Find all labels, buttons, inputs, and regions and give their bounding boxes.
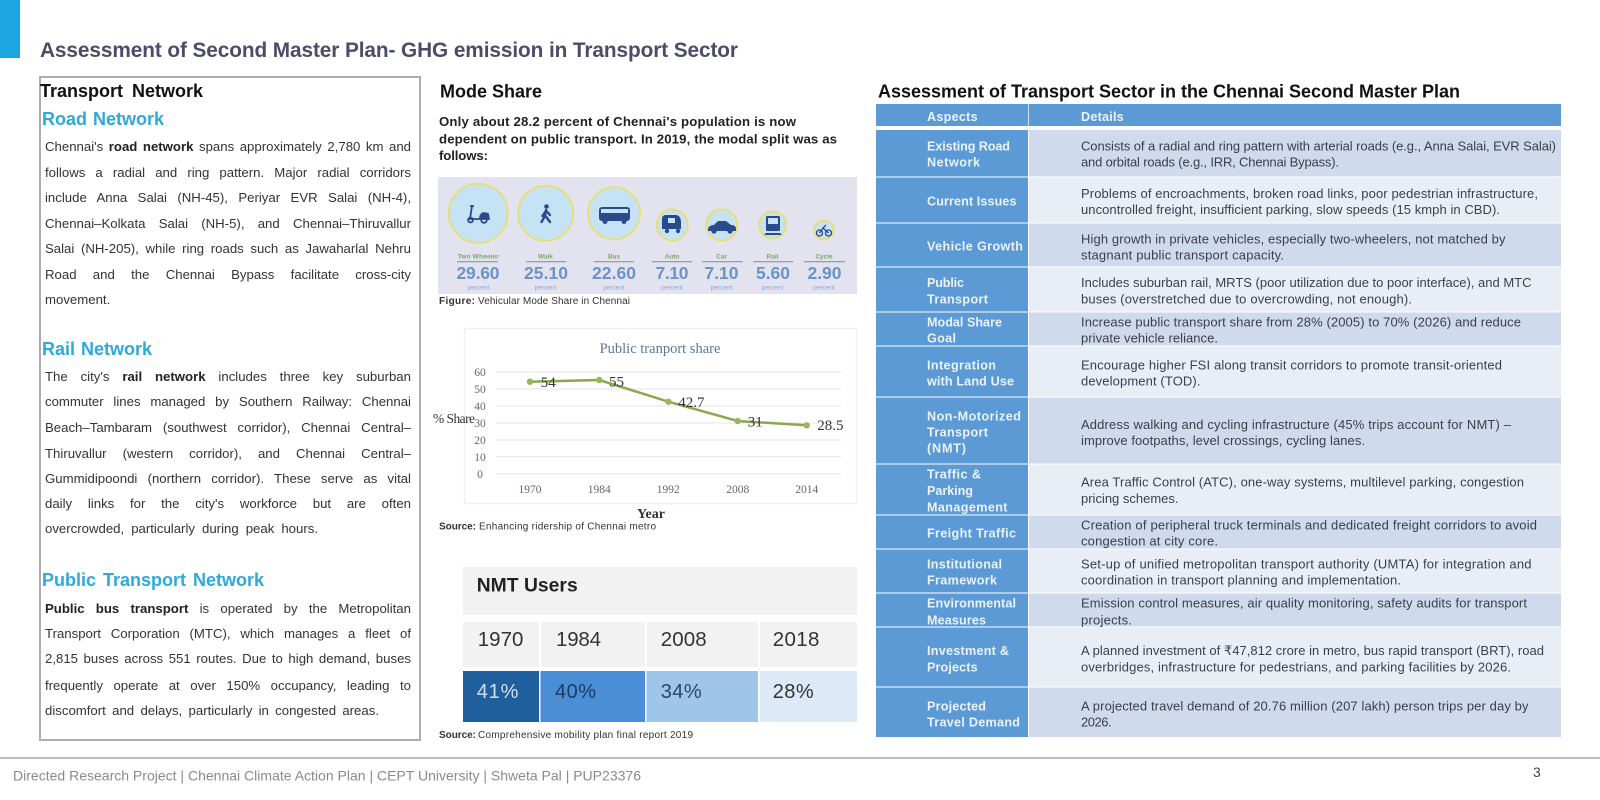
mode share values — [456, 263, 842, 283]
row: investment and projects — [876, 628, 1561, 686]
footer text: Directed Research Project | Chennai Climate Action Plan | CEPT University | Shweta Pal | PUP23376 — [13, 768, 641, 784]
mode share intro text: Only about 28.2 percent of Chennai's population is now — [439, 114, 797, 129]
row: institutional framework: Framework — [927, 574, 998, 588]
row: traffic and parking management: Traffic & — [927, 468, 981, 482]
NMT values: 41% — [477, 681, 519, 703]
NMT source: Comprehensive mobility plan final report 2019 — [478, 730, 693, 741]
table header row: Aspects — [927, 110, 978, 124]
row: modal share goal: Increase public transport share from 28% (2005) to 70% (2026) and reduce — [1081, 314, 1521, 330]
row: vehicle growth — [876, 224, 1561, 266]
figure caption: Vehicular Mode Share in Chennai — [478, 296, 630, 307]
row: existing road network: Existing Road — [927, 140, 1010, 154]
row: institutional framework: Set-up of unified metropolitan transport authority (UMTA) for integration and — [1081, 556, 1532, 572]
chart source: Enhancing ridership of Chennai metro — [479, 521, 656, 532]
mode share heading: Mode Share — [440, 82, 542, 102]
mode share infographic: percent — [661, 284, 683, 292]
x axis title: Year — [637, 507, 665, 522]
row: environmental measures: Emission control measures, air quality monitoring, safety audits for transport — [1081, 596, 1527, 610]
NMT years: 1984 — [556, 628, 601, 651]
corner accent bar — [0, 0, 20, 58]
mode share values: 29.60 — [456, 263, 500, 283]
mode share infographic: percent — [711, 284, 733, 292]
mode share infographic: percent — [535, 284, 557, 292]
row: environmental measures — [876, 594, 1561, 628]
mode share labels: Two Wheeler — [458, 254, 499, 260]
row: integration with land use: development (TOD). — [1081, 374, 1200, 388]
y axis labels: 50 — [474, 384, 486, 396]
icon: bus — [599, 207, 630, 224]
title: Assessment of Second Master Plan- GHG emission in Transport Sector — [40, 39, 738, 62]
row: modal share goal: Goal — [927, 332, 956, 346]
road network text: movement. — [45, 292, 110, 307]
rail network text: daily links for the city's workforce but are often — [45, 496, 411, 511]
public transport network text: Transport Corporation (MTC), which manages a fleet of — [45, 626, 411, 641]
row: modal share goal: Modal Share — [927, 316, 1002, 330]
mode share infographic: percent — [467, 284, 489, 292]
mode share values: 7.10 — [656, 263, 689, 283]
NMT heading: NMT Users — [477, 576, 578, 597]
panel: mode share — [433, 82, 857, 741]
row: existing road network: Network — [927, 156, 981, 170]
mode share labels — [458, 254, 833, 260]
row: non-motorized transport: Address walking and cycling infrastructure (45% trips account for NMT) – — [1081, 417, 1512, 432]
data labels: 28.5 — [817, 418, 844, 434]
row: environmental measures: Measures — [927, 614, 986, 628]
y axis labels: 20 — [474, 435, 486, 447]
mode share labels: Car — [716, 254, 728, 260]
public transport network text: discomfort and delays, particularly in congested areas. — [45, 702, 379, 718]
rail network text: overcrowded, particularly during peak hours. — [45, 521, 318, 536]
y axis labels: 0 — [477, 469, 483, 481]
row: traffic and parking management: pricing schemes. — [1081, 491, 1178, 506]
row: projected travel demand: A projected travel demand of 20.76 million (207 lakh) person trips per day by — [1081, 698, 1529, 714]
x axis labels: 1970 — [518, 484, 542, 496]
y axis labels: 60 — [474, 367, 486, 379]
road network text: include Anna Salai (NH-45), Periyar EVR Salai (NH-4), — [45, 190, 411, 205]
road network text: Chennai's road network spans approximately 2,780 km and — [45, 139, 411, 154]
mode share values: 2.90 — [808, 263, 842, 283]
icon: two wheeler — [468, 206, 489, 223]
icon: auto rickshaw — [662, 215, 681, 233]
table heading: Assessment of Transport Sector in the Chennai Second Master Plan — [878, 82, 1460, 102]
road network text: follows a radial and ring pattern. Major radial corridors — [45, 165, 411, 180]
row: integration with land use: with Land Use — [926, 374, 1014, 388]
rail network text — [45, 369, 411, 536]
row: institutional framework: Institutional — [927, 558, 1002, 572]
row: freight traffic: congestion at city core. — [1081, 534, 1218, 548]
row: non-motorized transport: Transport — [927, 426, 989, 440]
row: traffic and parking management: Management — [927, 500, 1008, 514]
mode share infographic: percent — [603, 284, 625, 292]
rail network text: Beach–Tambaram (southwest corridor), Chennai Central– — [45, 420, 411, 434]
icon: rail — [764, 216, 782, 235]
rail network text: commuter lines managed by Southern Railway: Chennai — [45, 394, 411, 409]
row: projected travel demand: Projected — [927, 700, 986, 714]
row: traffic and parking management — [876, 464, 1561, 514]
mode share values: 7.10 — [704, 263, 739, 283]
road network text: Salai (NH-205), while ring roads such as Jawaharlal Nehru — [45, 241, 411, 256]
rail network text: The city's rail network includes three key suburban — [45, 369, 411, 384]
row: vehicle growth: stagnant public transport capacity. — [1081, 248, 1284, 262]
row: investment and projects: Investment & — [927, 644, 1009, 658]
icon: walking person — [542, 204, 550, 222]
mode share infographic: percent — [762, 284, 784, 292]
panel heading: Transport Network — [40, 81, 203, 101]
x axis labels — [518, 484, 818, 496]
mode share labels: Bus — [608, 254, 621, 260]
row: current issues: Problems of encroachments, broken road links, poor pedestrian infrastructure, — [1081, 186, 1538, 201]
figure caption: Figure: — [439, 296, 475, 307]
row: freight traffic — [876, 516, 1561, 548]
panel: assessment table — [876, 82, 1561, 737]
y axis labels — [474, 367, 486, 481]
x axis labels: 2014 — [795, 484, 818, 496]
row: current issues — [876, 178, 1561, 222]
row: freight traffic: Creation of peripheral truck terminals and dedicated freight corridors to avoid — [1081, 518, 1537, 532]
row: public transport: Includes suburban rail, MRTS (poor utilization due to poor interface), and MTC — [1081, 275, 1532, 290]
row: existing road network — [876, 130, 1561, 176]
x axis labels: 1992 — [657, 484, 680, 496]
mode share intro text: dependent on public transport. In 2019, the modal split was as — [439, 131, 837, 146]
row: non-motorized transport: Non-Motorized — [927, 410, 1021, 424]
NMT users table — [463, 567, 857, 722]
row: non-motorized transport — [876, 398, 1561, 464]
row: institutional framework — [876, 550, 1561, 592]
row: current issues: uncontrolled freight, insufficient parking, slow speeds (15 kmph in CBD). — [1081, 202, 1500, 217]
row: investment and projects: overbridges, infrastructure for pedestrians, and parking facilities by 2026. — [1081, 660, 1511, 674]
y axis labels: 40 — [474, 401, 486, 413]
NMT years: 2008 — [661, 628, 707, 651]
public transport network text: 2,815 buses across 551 routes. Due to high demand, buses — [45, 651, 411, 666]
mode share infographic — [438, 177, 857, 294]
public transport network text: Public bus transport is operated by the Metropolitan — [45, 601, 411, 616]
row: non-motorized transport: improve footpaths, level crossings, cycling lanes. — [1081, 433, 1365, 448]
data labels — [541, 375, 844, 434]
rail network text: Gummidipoondi (northern corridor). These serve as vital — [45, 471, 411, 486]
row: integration with land use: Encourage higher FSI along transit corridors to promote transit-oriented — [1081, 358, 1502, 372]
NMT years: 1970 — [478, 628, 523, 651]
public transport network heading: Public Transport Network — [42, 570, 264, 590]
NMT years — [478, 628, 819, 651]
icon: cycle — [816, 225, 832, 236]
row: existing road network: Consists of a radial and ring pattern with arterial roads (e.g., Anna Salai, EVR Salai) — [1081, 138, 1556, 154]
y axis labels: 10 — [474, 452, 486, 464]
NMT values — [477, 681, 814, 703]
row: projected travel demand — [876, 688, 1561, 737]
line chart: public transport share — [433, 328, 856, 522]
public transport network text: frequently operate at over 150% occupancy, leading to — [45, 678, 411, 692]
row: traffic and parking management: Area Traffic Control (ATC), one-way systems, multilevel parking, congestion — [1081, 474, 1524, 490]
page number: 3 — [1533, 764, 1541, 780]
y axis title: % Share — [433, 411, 475, 426]
data labels: 42.7 — [678, 395, 705, 411]
mode share labels: Walk — [538, 254, 553, 260]
mode share intro text — [439, 114, 837, 163]
NMT values: 34% — [661, 681, 702, 703]
mode share labels: Auto — [665, 254, 679, 260]
road network text: Chennai–Kolkata Salai (NH-5), and Chennai–Thiruvallur — [45, 216, 411, 231]
row: vehicle growth: Vehicle Growth — [927, 240, 1023, 254]
row: modal share goal — [876, 312, 1561, 346]
chart source: Source: — [439, 521, 476, 532]
road network heading: Road Network — [42, 109, 164, 129]
NMT values: 28% — [773, 681, 814, 703]
row: freight traffic: Freight Traffic — [927, 526, 1016, 540]
y axis labels: 30 — [474, 418, 486, 430]
x axis labels: 2008 — [726, 484, 749, 496]
rail network heading: Rail Network — [42, 339, 152, 359]
mode share values: 22.60 — [592, 263, 636, 283]
row: traffic and parking management: Parking — [927, 484, 973, 498]
public transport network text — [45, 601, 412, 718]
mode share labels: Cycle — [815, 254, 833, 260]
row: investment and projects: A planned investment of ₹47,812 crore in metro, bus rapid transport (BRT), road — [1081, 643, 1544, 658]
rail network text: Thiruvallur (western corridor), and Chennai Central– — [45, 446, 411, 460]
NMT values: 40% — [555, 681, 596, 703]
row: institutional framework: coordination in transport planning and implementation. — [1081, 572, 1401, 588]
row: public transport: Public — [927, 276, 964, 290]
row: investment and projects: Projects — [927, 660, 978, 674]
data labels: 55 — [609, 375, 624, 391]
mode share values: 5.60 — [756, 263, 790, 283]
panel: transport network — [39, 76, 421, 741]
row: environmental measures: projects. — [1081, 612, 1132, 628]
row: public transport: buses (overstretched due to overcrowding, not enough). — [1081, 292, 1412, 306]
row: current issues: Current Issues — [927, 194, 1016, 208]
table header row: Details — [1081, 110, 1124, 124]
row: public transport: Transport — [927, 292, 989, 306]
row: projected travel demand: 2026. — [1081, 714, 1112, 730]
chart title: Public tranport share — [600, 341, 720, 357]
mode share values: 25.10 — [524, 263, 568, 283]
icon: car — [708, 221, 736, 234]
road network text — [45, 139, 411, 307]
row: modal share goal: private vehicle reliance. — [1081, 330, 1218, 346]
data labels: 31 — [748, 415, 763, 431]
mode share infographic: percent — [813, 284, 835, 292]
row: integration with land use: Integration — [927, 358, 996, 372]
row: vehicle growth: High growth in private vehicles, especially two-wheelers, not matched by — [1081, 232, 1506, 246]
mode share labels: Rail — [767, 254, 779, 260]
data labels: 54 — [541, 375, 556, 391]
table header row — [876, 104, 1561, 126]
data line — [527, 377, 810, 428]
row: integration with land use — [876, 346, 1561, 396]
road network text: Road and the Chennai Bypass facilitate cross-city — [45, 267, 411, 282]
mode share intro text: follows: — [439, 148, 488, 163]
x axis labels: 1984 — [588, 484, 611, 496]
row: projected travel demand: Travel Demand — [927, 716, 1020, 730]
row: non-motorized transport: (NMT) — [927, 442, 966, 456]
row: public transport — [876, 268, 1561, 312]
NMT source: Source: — [439, 730, 476, 741]
row: existing road network: and orbital roads (e.g., IRR, Chennai Bypass). — [1081, 154, 1339, 170]
NMT years: 2018 — [773, 628, 819, 651]
row: environmental measures: Environmental — [927, 596, 1016, 610]
